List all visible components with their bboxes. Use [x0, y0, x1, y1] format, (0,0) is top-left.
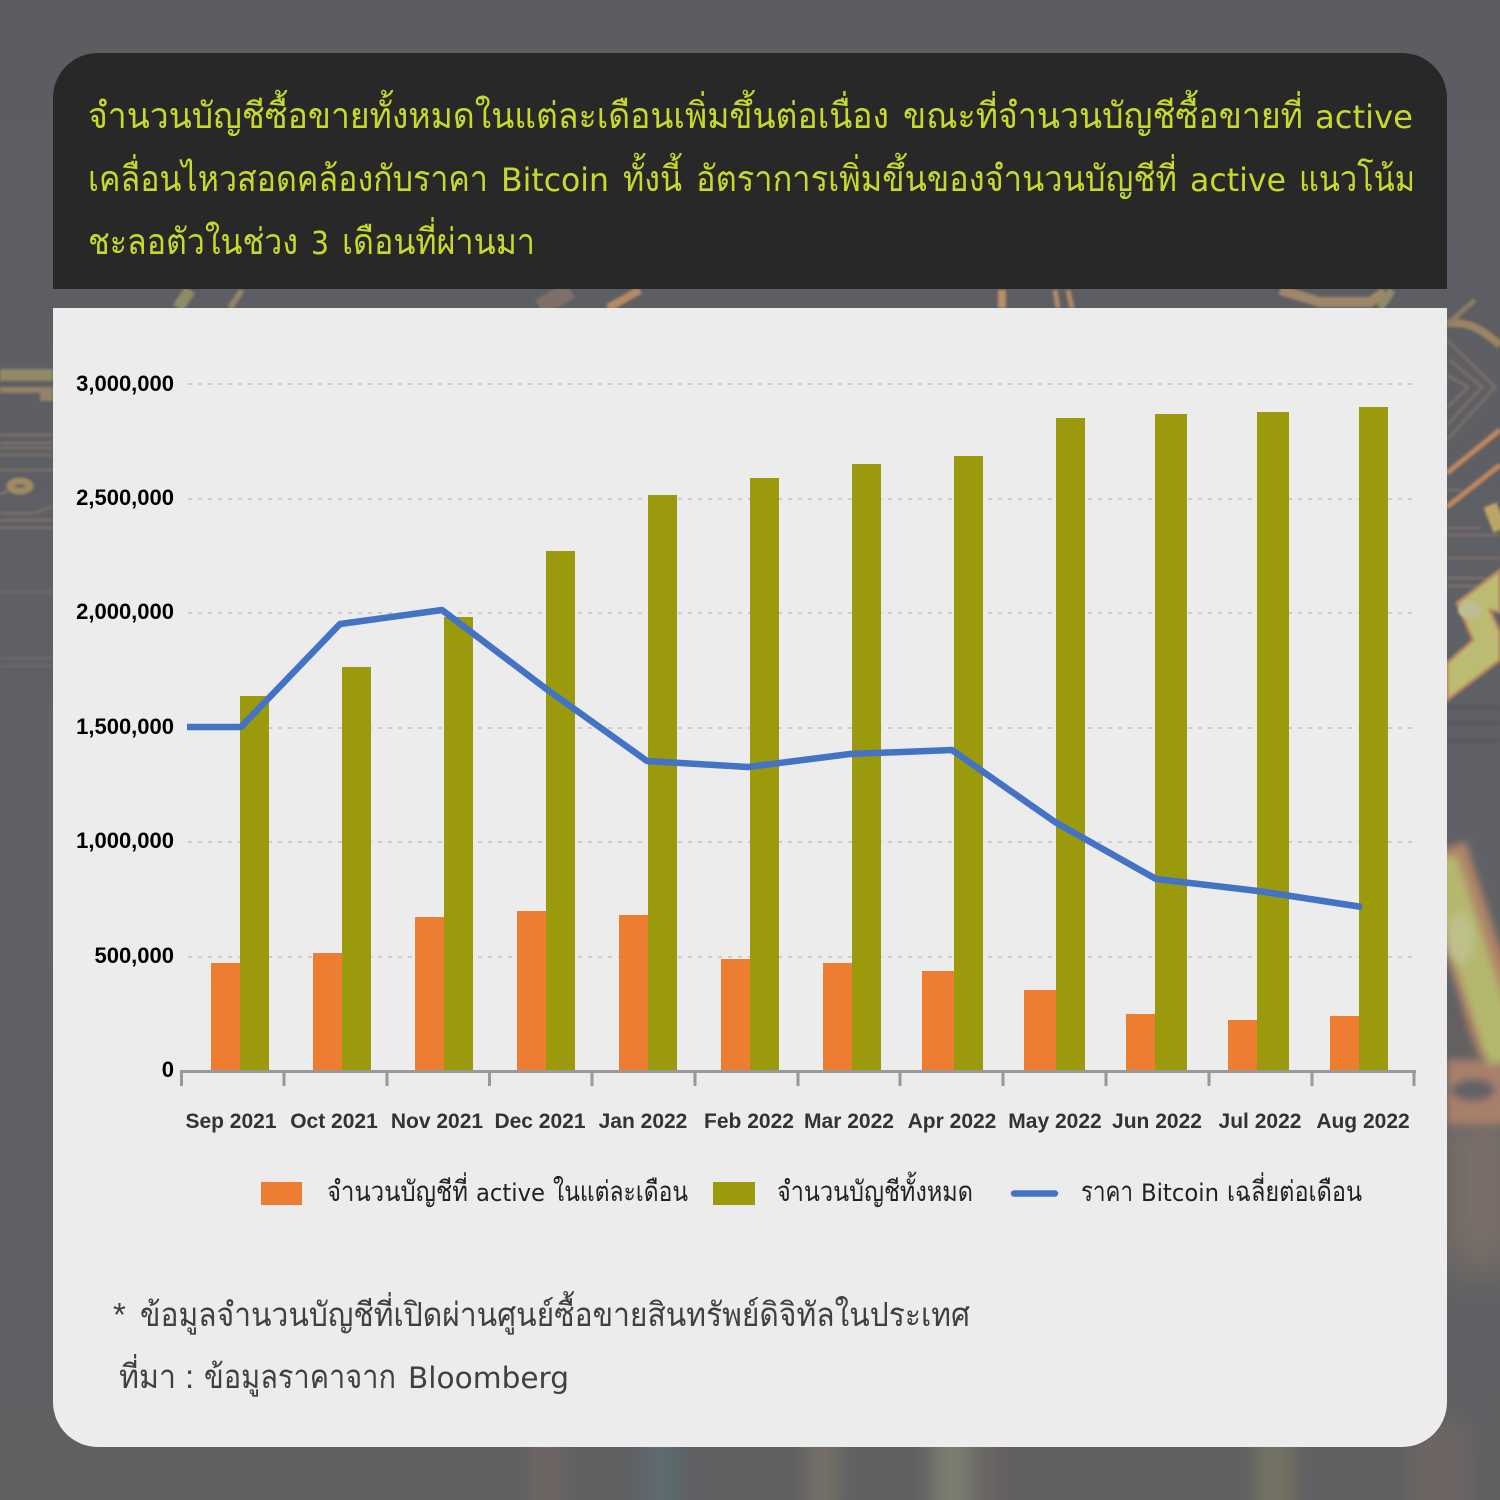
legend: จำนวนบัญชีที่ [327, 1172, 468, 1207]
header text: ชะลอตัวในช่วง [88, 221, 298, 262]
grid lines and y axis labels [76, 371, 1412, 1082]
footnote: * [113, 1296, 126, 1333]
header text: 3 [311, 224, 329, 262]
header text: active [1315, 98, 1413, 136]
footnote: : [185, 1358, 194, 1395]
footnote: ที่มา [119, 1354, 176, 1395]
header text: ทั้งนี้ [623, 152, 683, 199]
panel: chart [53, 308, 1447, 1447]
x axis labels: Sep 2021 [185, 1110, 277, 1133]
x axis labels: Aug 2022 [1316, 1110, 1410, 1133]
bars: active accounts per month [211, 911, 1359, 1071]
header panel [53, 53, 1447, 289]
header text: อัตราการเพิ่มขึ้นของจำนวนบัญชีที่ [696, 152, 1177, 199]
x axis labels: Oct 2021 [290, 1110, 378, 1133]
footnote [113, 1291, 970, 1397]
legend: จำนวนบัญชีทั้งหมด [777, 1171, 973, 1207]
x axis labels: May 2022 [1008, 1110, 1102, 1133]
x axis labels: Jul 2022 [1219, 1110, 1301, 1133]
x axis labels [185, 1110, 1410, 1133]
grid lines and y axis labels: 1,000,000 [76, 828, 174, 853]
header text: จำนวนบัญชีซื้อขายทั้งหมดในแต่ละเดือนเพิ่มขึ้นต่อเนื่อง [88, 89, 889, 136]
legend: เฉลี่ยต่อเดือน [1227, 1172, 1362, 1207]
footnote: Bloomberg [408, 1361, 569, 1395]
footnote: ข้อมูลราคาจาก [204, 1358, 396, 1397]
x axis labels: Mar 2022 [804, 1110, 894, 1133]
grid lines and y axis labels: 500,000 [94, 943, 174, 968]
grid lines and y axis labels: 0 [162, 1057, 174, 1082]
line: average Bitcoin price [187, 610, 1362, 907]
x axis labels: Apr 2022 [908, 1110, 996, 1133]
x axis labels: Dec 2021 [494, 1110, 586, 1133]
x axis labels: Jun 2022 [1112, 1110, 1202, 1133]
grid lines and y axis labels: 1,500,000 [76, 714, 174, 739]
x axis labels: Nov 2021 [391, 1110, 483, 1133]
header text: เคลื่อนไหวสอดคล้องกับราคา [88, 154, 488, 199]
legend: Bitcoin [1141, 1179, 1219, 1207]
legend: ในแต่ละเดือน [553, 1175, 688, 1207]
header text: เดือนที่ผ่านมา [342, 217, 535, 262]
x axis labels: Jan 2022 [599, 1110, 687, 1133]
grid lines and y axis labels: 2,000,000 [76, 599, 174, 624]
header text [88, 89, 1415, 262]
legend: active [476, 1179, 545, 1207]
footnote: ข้อมูลจำนวนบัญชีที่เปิดผ่านศูนย์ซื้อขายสินทรัพย์ดิจิทัลในประเทศ [140, 1291, 970, 1335]
grid lines and y axis labels: 2,500,000 [76, 485, 174, 510]
header text: แนวโน้ม [1299, 158, 1415, 199]
x axis with ticks [180, 1071, 1416, 1086]
grid lines and y axis labels: 3,000,000 [76, 371, 174, 396]
header text: ขณะที่จำนวนบัญชีซื้อขายที่ [903, 89, 1303, 136]
bars: total accounts [240, 407, 1388, 1071]
legend [261, 1171, 1362, 1207]
header text: active [1190, 161, 1286, 199]
x axis labels: Feb 2022 [704, 1110, 794, 1133]
header text: Bitcoin [501, 161, 609, 199]
legend: ราคา [1081, 1176, 1133, 1207]
